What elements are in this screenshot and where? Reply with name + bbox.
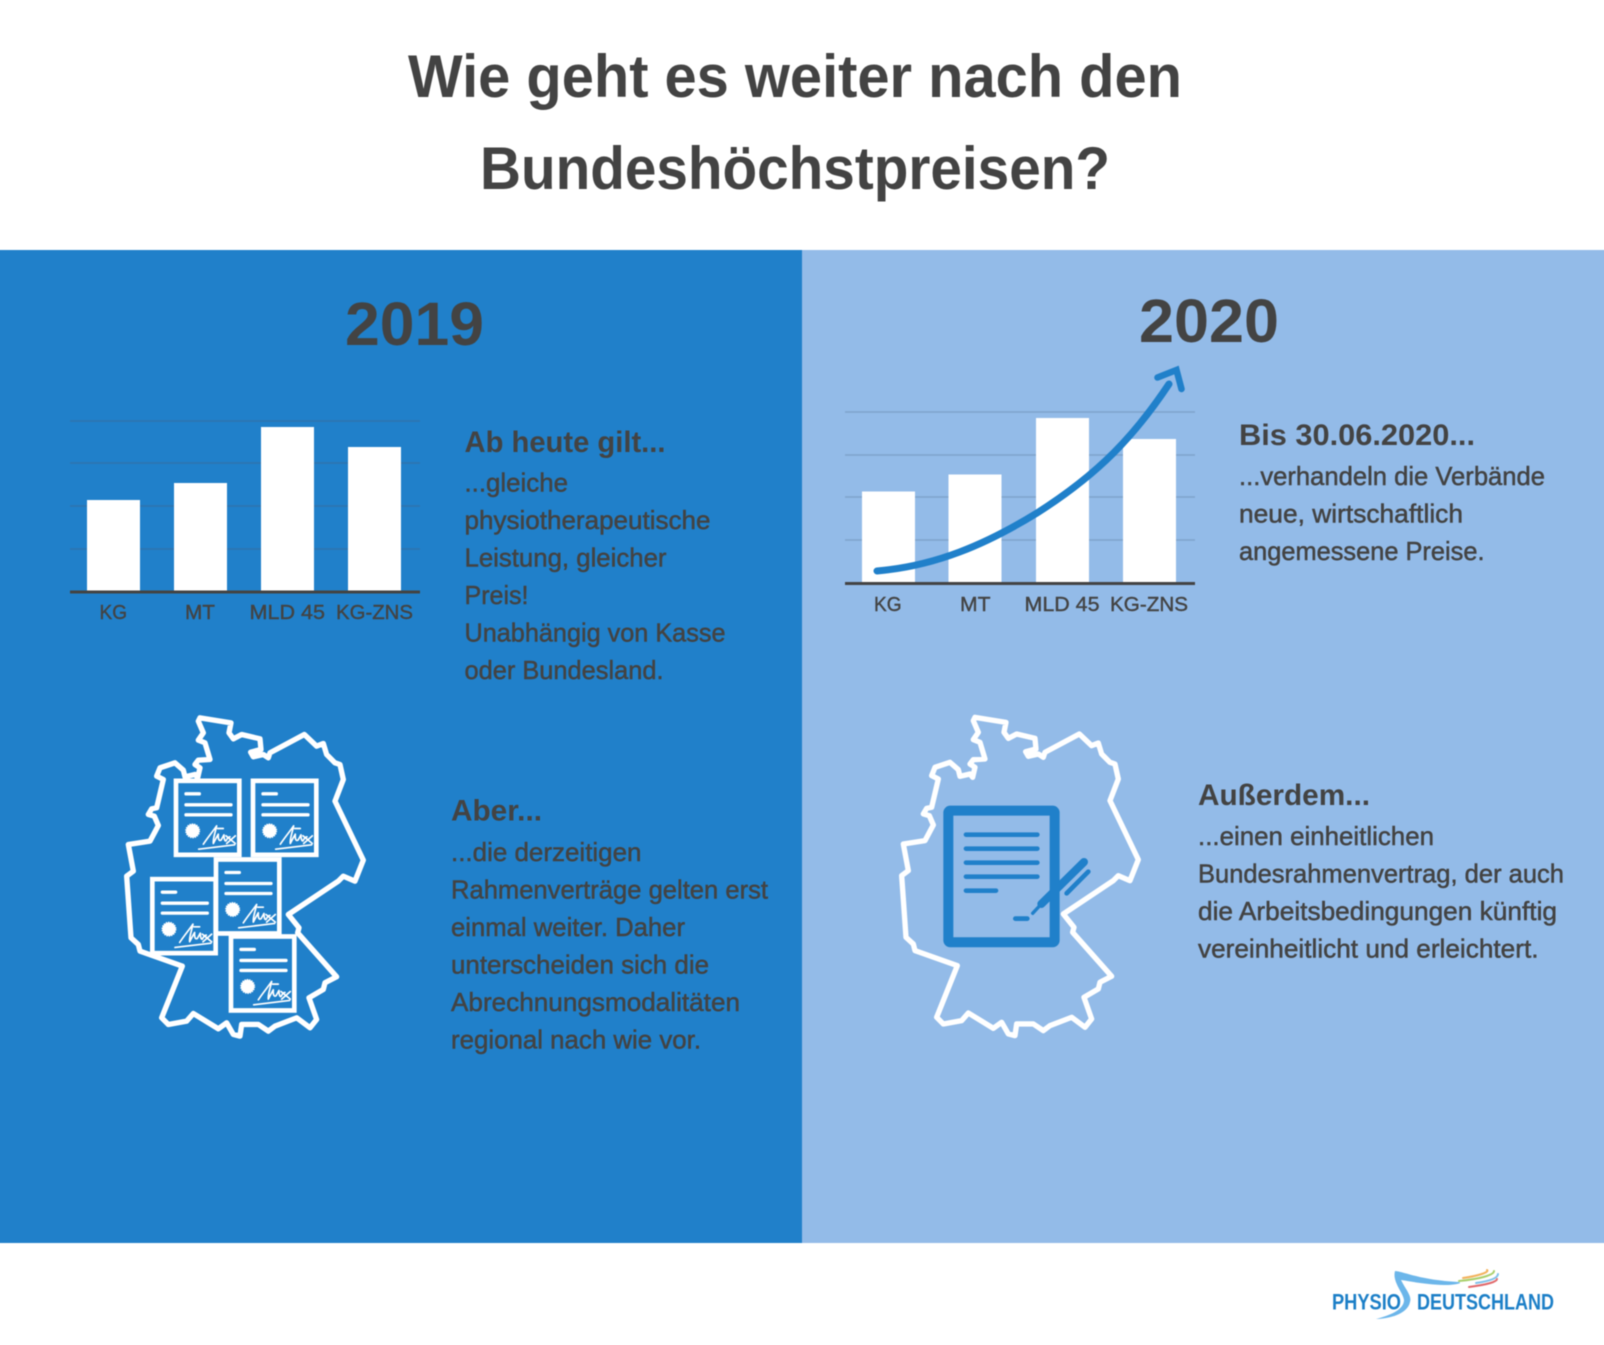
text block: Bis 30.06.2020: neue, wirtschaftlich	[1239, 498, 1463, 528]
text block: Außerdem: Bundesrahmenvertrag, der auch	[1198, 858, 1564, 888]
text block: Aber: Rahmenverträge gelten erst	[451, 874, 769, 904]
contract 1	[176, 781, 239, 855]
text block: Aber: ...die derzeitigen	[451, 837, 642, 867]
icon: contract	[948, 811, 1055, 942]
bar chart: 2020: KG-ZNS	[1110, 594, 1188, 616]
text block: Ab heute gilt: oder Bundesland.	[464, 655, 664, 685]
text block: Außerdem	[1198, 779, 1564, 964]
title	[408, 43, 1182, 202]
heading: 2020: 2020	[1139, 287, 1279, 355]
bar chart: 2020: MT	[960, 594, 990, 616]
contract 2	[253, 781, 316, 855]
panel: 2019	[0, 250, 802, 1243]
text block: Bis 30.06.2020: ...verhandeln die Verbände	[1239, 461, 1545, 491]
contract 3	[216, 859, 279, 933]
icon: pen	[1033, 862, 1088, 913]
text block: Ab heute gilt: Preis!	[464, 580, 528, 610]
logo: Physio Deutschland: DEUTSCHLAND	[1417, 1290, 1554, 1314]
title: Wie geht es weiter nach den	[408, 43, 1182, 110]
text block: Ab heute gilt	[464, 426, 726, 685]
logo wordmark: PHYSIO	[1332, 1290, 1401, 1314]
bar chart: 2020	[845, 412, 1195, 616]
arrow: rising trend	[877, 370, 1182, 571]
text block: Ab heute gilt: ...gleiche	[464, 468, 568, 498]
title: Bundeshöchstpreisen?	[480, 135, 1110, 202]
text block: Ab heute gilt: Leistung, gleicher	[464, 542, 667, 572]
text block: Aber: regional nach wie vor.	[451, 1024, 701, 1054]
bar chart: 2019: KG-ZNS	[336, 602, 413, 624]
text block: Aber: unterscheiden sich die	[451, 950, 709, 980]
bar chart: 2019	[70, 421, 420, 624]
contract 4	[152, 879, 216, 953]
text block: Aber: Abrechnungsmodalitäten	[451, 987, 740, 1017]
text block: Bis 30.06.2020: Bis 30.06.2020...	[1239, 419, 1475, 452]
text block: Außerdem: die Arbeitsbedingungen künftig	[1198, 896, 1557, 926]
text block: Ab heute gilt: Ab heute gilt...	[464, 426, 666, 459]
contract 5	[231, 936, 294, 1010]
text block: Außerdem: Außerdem...	[1198, 779, 1370, 812]
bar chart: 2019: MT	[185, 602, 215, 624]
text block: Aber	[451, 794, 769, 1054]
map: Germany with contracts	[127, 718, 363, 1036]
text block: Aber: Aber...	[451, 794, 542, 828]
logo: Physio Deutschland	[1332, 1270, 1554, 1319]
panel: 2020	[802, 250, 1604, 1243]
logo rainbow	[1459, 1270, 1498, 1287]
text block: Außerdem: vereinheitlicht und erleichtert.	[1198, 934, 1538, 964]
bar chart: 2020: KG	[874, 594, 902, 616]
text block: Ab heute gilt: Unabhängig von Kasse	[464, 618, 726, 648]
text block: Aber: einmal weiter. Daher	[451, 912, 685, 942]
text block: Bis 30.06.2020: angemessene Preise.	[1239, 536, 1484, 566]
heading: 2019: 2019	[345, 290, 484, 358]
text block: Bis 30.06.2020	[1239, 419, 1545, 566]
text block: Außerdem: ...einen einheitlichen	[1198, 821, 1434, 851]
bar chart: 2020: MLD 45	[1024, 594, 1100, 616]
logo swoosh	[1376, 1271, 1460, 1319]
map: Germany with contract and pen	[902, 717, 1138, 1036]
text block: Ab heute gilt: physiotherapeutische	[464, 505, 710, 535]
bar chart: 2019: KG	[100, 602, 127, 624]
bar chart: 2019: MLD 45	[250, 602, 325, 624]
